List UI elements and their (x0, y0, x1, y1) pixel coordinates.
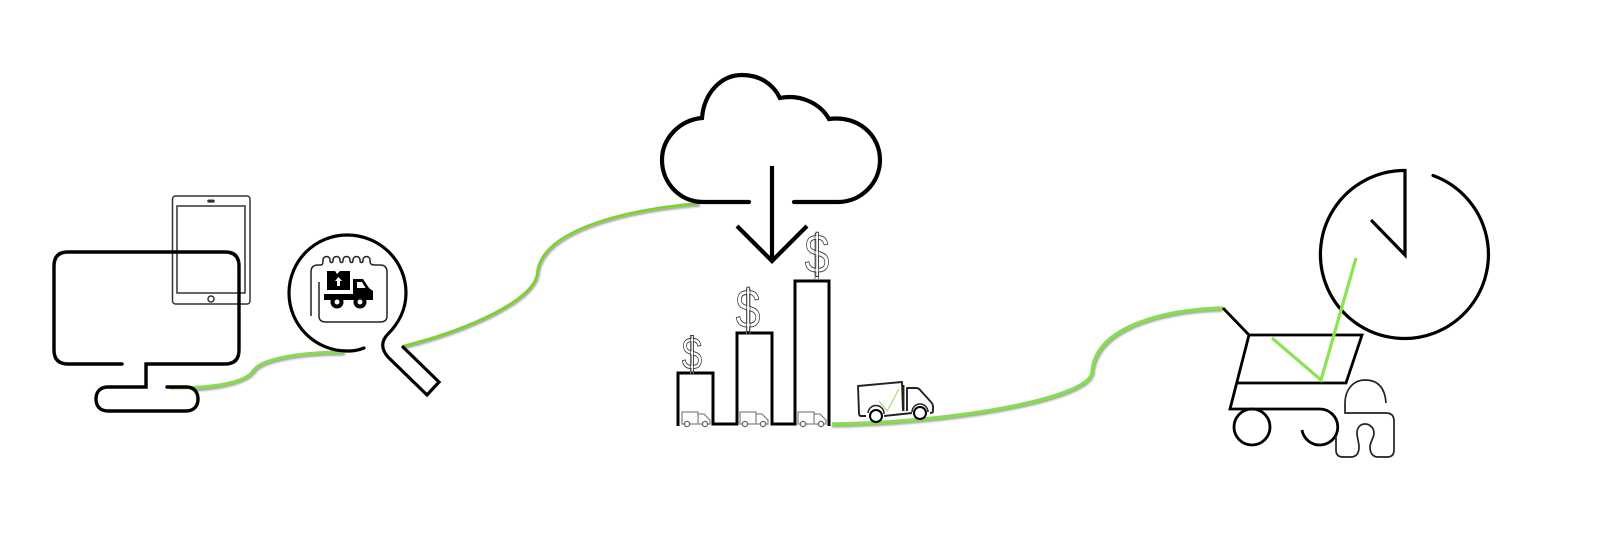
connector: magnifier to cloud (403, 203, 700, 348)
dollar sign medium: $ (736, 278, 760, 340)
delivery truck glyph (324, 271, 373, 308)
small trucks (682, 412, 826, 427)
connector: bars to cart (832, 308, 1223, 426)
icon: tablet (172, 196, 250, 304)
dollar sign large: $ (805, 223, 829, 285)
connector: monitor to magnifier (170, 352, 345, 390)
icon: shopping cart (1223, 308, 1362, 445)
calendar outline (311, 257, 387, 322)
download arrow (737, 166, 807, 261)
icon: cloud with download arrow (662, 75, 880, 261)
icon: delivery van with check (858, 382, 933, 422)
icon: clock (1320, 170, 1488, 338)
icon: magnifier with delivery calendar (289, 235, 439, 395)
icon: desktop monitor (54, 252, 239, 411)
check mark: green (1272, 258, 1356, 380)
icon: padlock (1336, 380, 1394, 457)
bar chart with dollar signs (678, 223, 829, 427)
dollar sign small: $ (682, 328, 702, 379)
